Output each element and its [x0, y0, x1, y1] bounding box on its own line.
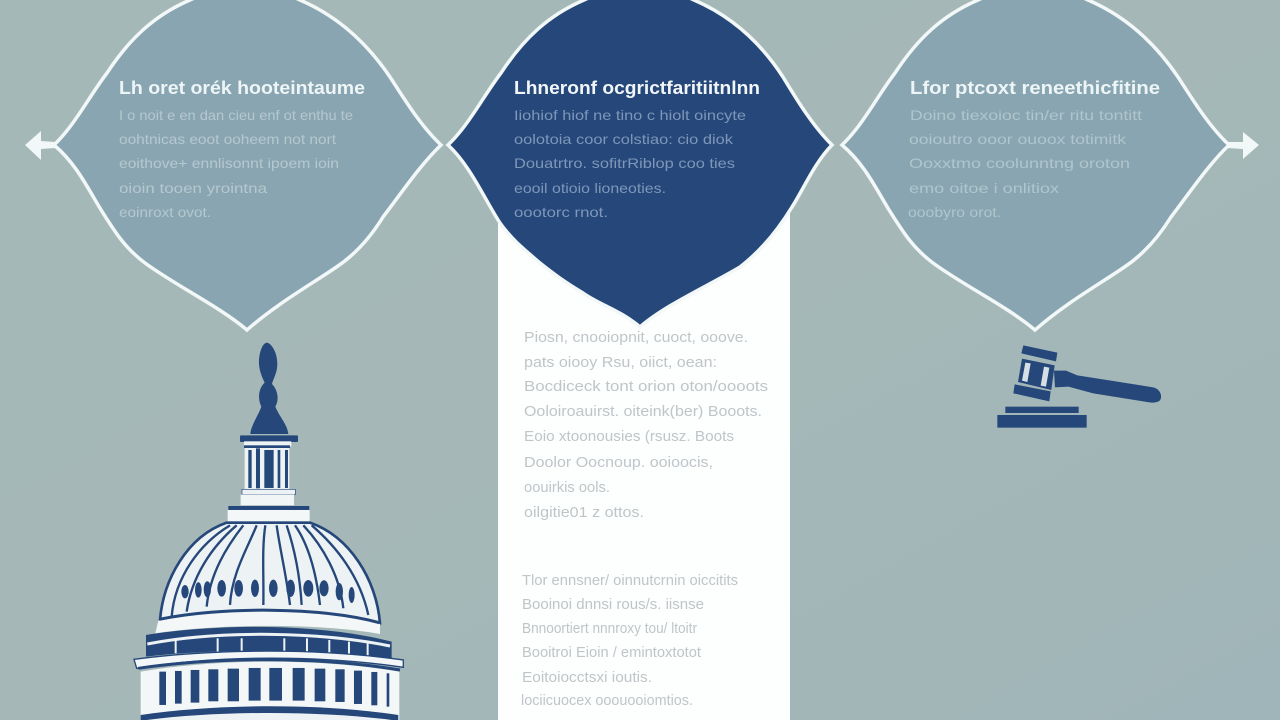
text block: left lobe: I o noit e en dan cieu enf ot enthu te [119, 107, 353, 123]
text block: right lobe [908, 107, 1142, 220]
lantern base [242, 489, 295, 495]
panel: left lobe [54, 0, 441, 330]
text block: right lobe: ooobyro orot. [908, 204, 1001, 220]
white text block: upper paragraph: Ooloiroauirst. oiteink(ber) Booots. [524, 403, 762, 420]
drum [141, 662, 399, 720]
panel: centre lobe [448, 0, 832, 327]
white text block: upper paragraph: Bocdiceck tont orion oton/oooots [524, 378, 768, 395]
dome windows [181, 580, 355, 603]
lantern cap [240, 435, 298, 442]
panel: right lobe [842, 0, 1229, 330]
arrow: left [25, 131, 55, 160]
text block: left lobe [119, 107, 353, 220]
white text block: lower paragraph: Booinoi dnnsi rous/s. iisnse [522, 596, 704, 613]
heading: left lobe: Lh oret orék hooteintaume [119, 78, 365, 98]
blue frieze [146, 627, 392, 662]
arrow: right [1227, 132, 1259, 159]
white text block: upper paragraph: Doolor Oocnoup. ooioocis, [524, 454, 713, 471]
statue [250, 343, 288, 434]
text block: right lobe: Doino tiexoioc tin/er ritu tontitt [910, 107, 1142, 123]
text block: centre lobe: Iiohiof hiof ne tino c hiolt oincyte [514, 107, 746, 123]
white text block: lower paragraph: Booitroi Eioin / emintoxtotot [522, 644, 702, 661]
white text block: lower paragraph: Bnnoortiert nnnroxy tou/ ltoitr [522, 620, 697, 637]
text block: centre lobe: eooil otioio lioneoties. [514, 180, 666, 196]
base band [141, 706, 398, 720]
text block: centre lobe: Douatrtro. sofitrRiblop coo ties [514, 155, 735, 171]
text block: centre lobe [514, 107, 746, 220]
white text block: upper paragraph: oilgitie01 z ottos. [524, 504, 644, 521]
text block: right lobe: ooioutro ooor ouoox totimitk [909, 131, 1127, 147]
text block: left lobe: eoithove+ ennlisonnt ipoem ioin [119, 155, 339, 171]
cornice [134, 651, 403, 668]
text block: left lobe: eoinroxt ovot. [119, 204, 211, 220]
text block: right lobe: emo oitoe i onlitiox [909, 180, 1059, 196]
icon: capitol dome [134, 343, 403, 720]
dome ribs [172, 525, 368, 617]
dome rim [155, 611, 380, 634]
white text block: lower paragraph: Tlor ennsner/ oinnutcrnin oiccitits [522, 572, 738, 589]
text block: right lobe: Ooxxtmo coolunntng oroton [909, 155, 1130, 171]
white text block: upper paragraph: pats oiooy Rsu, oiict, oean: [524, 354, 717, 371]
panel: white centre column [498, 200, 790, 720]
heading: centre lobe: Lhneronf ocgrictfaritiitnlnn [514, 78, 760, 98]
lantern columns [245, 446, 289, 489]
heading: right lobe: Lfor ptcoxt reneethicfitine [910, 78, 1160, 98]
white text block: upper paragraph: Piosn, cnooiopnit, cuoct, ooove. [524, 329, 748, 346]
white text block: upper paragraph: Eoio xtoonousies (rsusz. Boots [524, 428, 734, 445]
frieze dividers [175, 638, 369, 657]
white text block: lower paragraph [521, 572, 738, 709]
dome body [160, 523, 380, 623]
text block: left lobe: oohtnicas eoot ooheem not nort [119, 131, 336, 147]
white text block: upper paragraph [524, 329, 768, 521]
white text block: upper paragraph: oouirkis ools. [524, 479, 610, 496]
text block: left lobe: oioin tooen yrointna [119, 180, 267, 196]
text block: centre lobe: oootorc rnot. [514, 204, 608, 220]
white text block: lower paragraph: Eoitoiocctsxi ioutis. [522, 669, 652, 686]
text block: centre lobe: oolotoia coor colstiao: cio diok [514, 131, 734, 147]
drum windows [159, 668, 389, 707]
white text block: lower paragraph: lociicuocex ooouooiomtios. [521, 692, 693, 709]
icon: gavel [997, 345, 1161, 428]
